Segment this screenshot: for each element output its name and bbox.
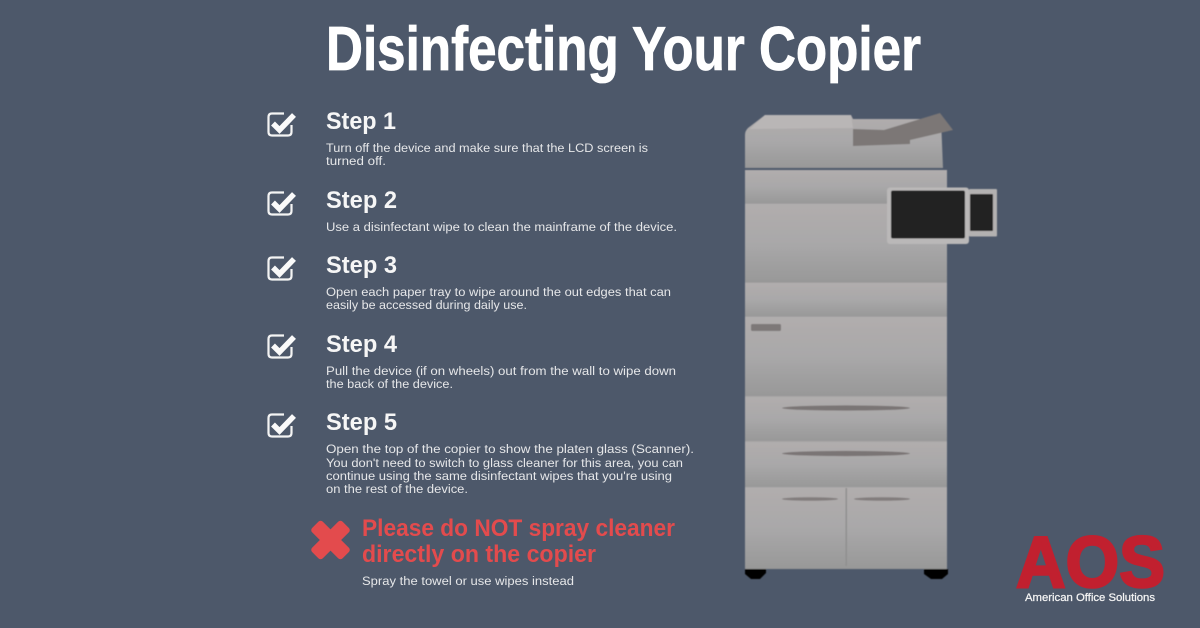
- warning heading: Please do NOT spray cleaner: [362, 515, 675, 542]
- step 5 text: Open the top of the copier to show the platen glass (Scanner).: [326, 442, 694, 456]
- step 3 heading: Step 3: [326, 252, 397, 279]
- drawer 2: [745, 442, 947, 487]
- step 5 text: on the rest of the device.: [326, 482, 468, 496]
- warning note: Spray the towel or use wipes instead: [362, 574, 574, 588]
- step 5 text: continue using the same disinfectant wipes that you're using: [326, 469, 672, 483]
- step 2: [268, 187, 677, 234]
- step 2 text: Use a disinfectant wipe to clean the mainframe of the device.: [326, 220, 677, 234]
- icon: checkbox 5: [268, 414, 294, 436]
- step 3 text: easily be accessed during daily use.: [326, 298, 527, 312]
- body backing: [745, 170, 947, 569]
- step 5 text: You don't need to switch to glass cleaner for this area, you can: [326, 456, 683, 470]
- warning callout: [300, 510, 675, 588]
- step 1: [268, 108, 648, 168]
- drawer 1: [745, 397, 947, 441]
- upper body: [745, 170, 947, 204]
- step 1 text: Turn off the device and make sure that the LCD screen is: [326, 141, 648, 155]
- step 2 heading: Step 2: [326, 187, 397, 214]
- step 1 heading: Step 1: [326, 108, 396, 135]
- wheels: [745, 569, 766, 579]
- middle body: [745, 317, 947, 396]
- step 3 text: Open each paper tray to wipe around the out edges that can: [326, 285, 671, 299]
- logo letters: AOS: [1016, 523, 1165, 603]
- copier feeder: [745, 115, 943, 168]
- step 4 text: the back of the device.: [326, 377, 453, 391]
- icon: checkbox 2: [268, 192, 294, 214]
- title: Disinfecting Your Copier: [326, 15, 921, 84]
- control panel: [887, 188, 997, 244]
- step 1 text: turned off.: [326, 154, 386, 168]
- step 4: [268, 331, 676, 391]
- icon: checkbox 3: [268, 258, 294, 280]
- cabinet: [745, 488, 947, 569]
- AOS logo: [1016, 523, 1165, 604]
- step 4 heading: Step 4: [326, 331, 398, 358]
- icon: red cross: [300, 510, 361, 570]
- step 4 text: Pull the device (if on wheels) out from the wall to wipe down: [326, 364, 676, 378]
- output tray: [853, 113, 953, 146]
- step 3: [268, 252, 671, 312]
- step 5 heading: Step 5: [326, 409, 397, 436]
- warning heading: directly on the copier: [362, 541, 596, 568]
- icon: checkbox 1: [268, 114, 294, 136]
- logo tagline: American Office Solutions: [1025, 592, 1156, 604]
- copier illustration: [745, 113, 997, 579]
- icon: checkbox 4: [268, 336, 294, 358]
- step 5: [268, 409, 694, 496]
